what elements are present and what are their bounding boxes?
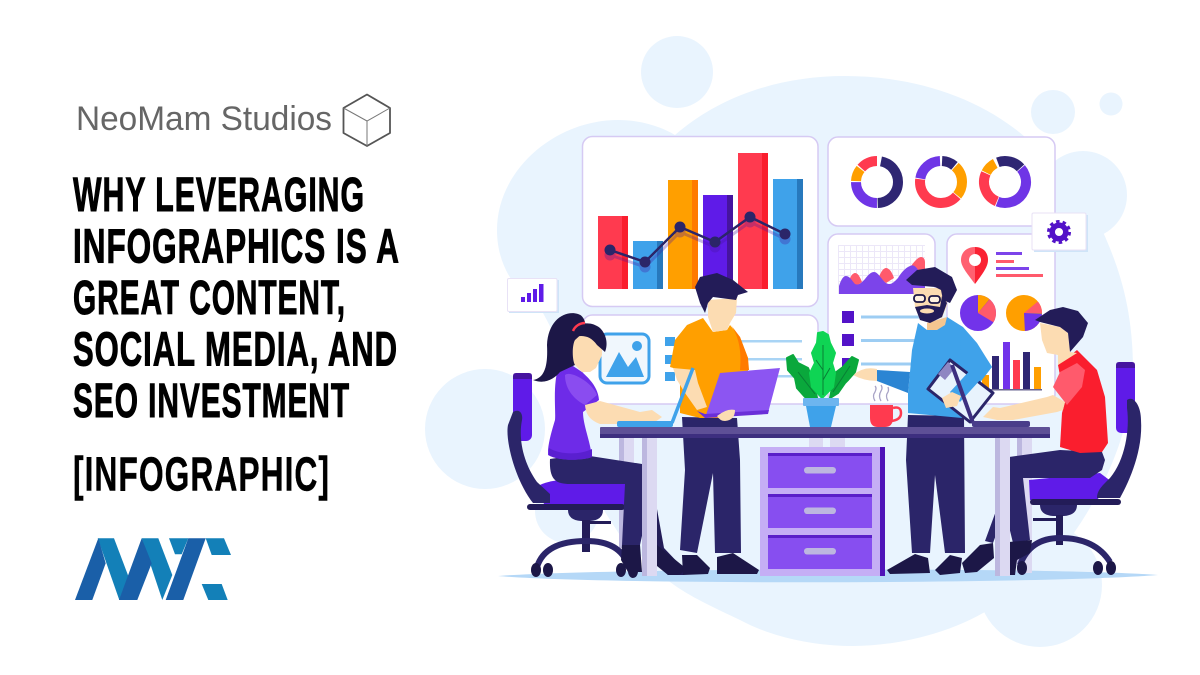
logo: MTC <box>75 538 231 600</box>
title: GREAT CONTENT, <box>73 272 346 325</box>
drawer cabinet <box>760 447 885 576</box>
illustration background blobs <box>425 36 1133 647</box>
title: SOCIAL MEDIA, AND <box>73 324 398 376</box>
person: man in blue shirt with clipboard <box>853 267 993 575</box>
icon card: signal bars <box>508 278 559 313</box>
person: standing man in orange shirt <box>670 273 780 575</box>
table <box>600 427 1050 576</box>
back table legs <box>619 438 1032 573</box>
title: SEO INVESTMENT <box>73 375 350 428</box>
panel: map pin, pies and bars <box>947 234 1055 404</box>
icon card: gear <box>1032 213 1088 252</box>
laptop: woman's <box>617 368 693 427</box>
title: WHY LEVERAGING <box>73 169 365 222</box>
brand: NeoMam Studios: NeoMam Studios <box>76 100 332 138</box>
laptop: seated man's <box>952 365 1030 427</box>
person: woman at laptop on chair <box>507 313 683 578</box>
subtitle: [INFOGRAPHIC] <box>73 448 330 502</box>
chair: left <box>507 373 638 578</box>
panel: area chart and list <box>828 234 935 404</box>
pot <box>803 398 839 427</box>
panel: bar and line chart <box>582 136 818 306</box>
brand: NeoMam Studios <box>76 94 390 146</box>
panel: donut charts <box>828 137 1055 226</box>
title <box>73 169 400 428</box>
chair: right <box>1017 362 1141 575</box>
floor shadow <box>498 569 1158 582</box>
plant <box>787 332 858 398</box>
person: seated man in red shirt on chair <box>962 307 1141 575</box>
panel: image and list <box>582 315 818 404</box>
coffee cup <box>870 385 901 427</box>
title: INFOGRAPHICS IS A <box>73 220 400 274</box>
